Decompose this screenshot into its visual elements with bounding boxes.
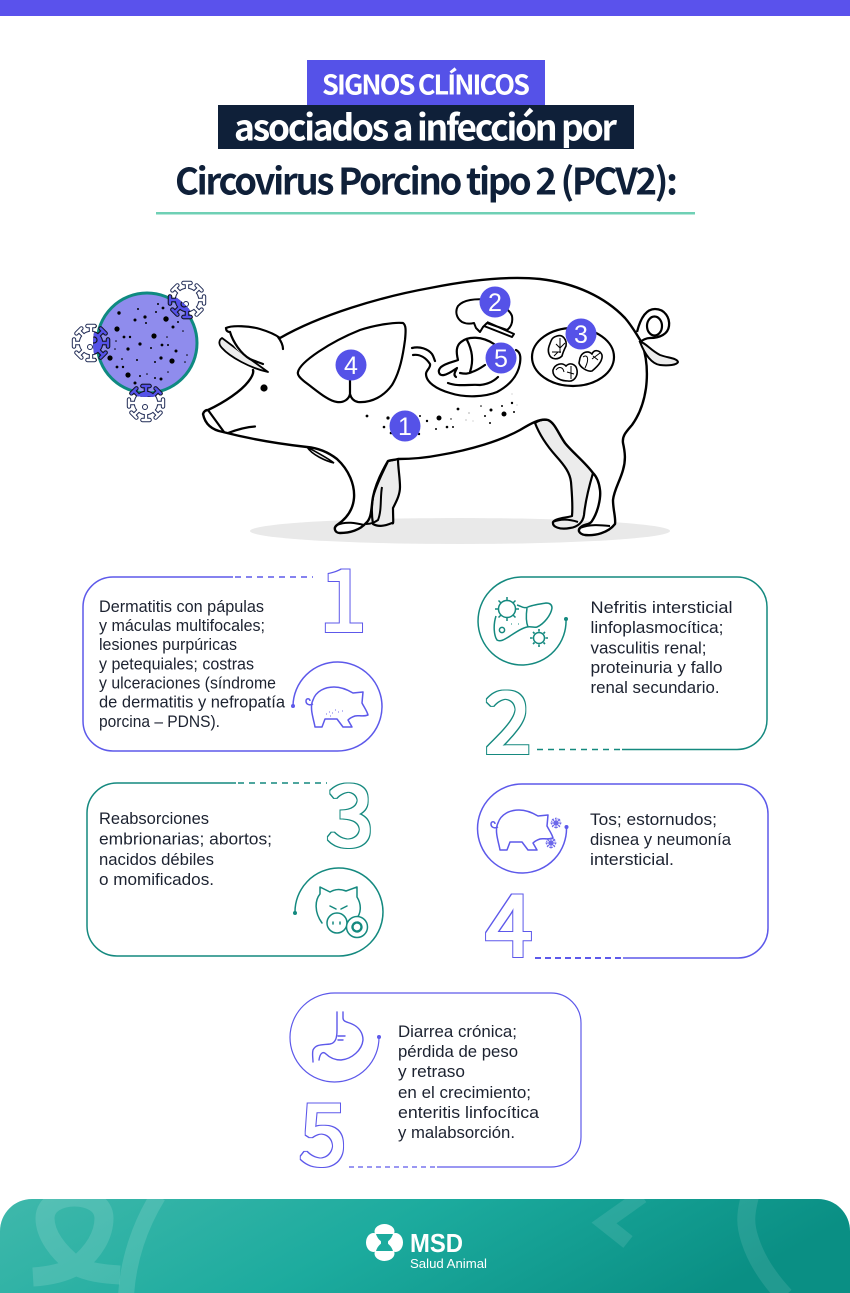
virus bottom [129, 386, 163, 420]
text block: y máculas multifocales; [99, 617, 265, 635]
text block: linfoplasmocítica; [590, 619, 724, 637]
panel 1: dermatitis [83, 533, 382, 751]
illustration: virus particle [74, 283, 204, 420]
virus top right [170, 283, 204, 317]
panel 3: reproductive [87, 748, 383, 956]
number badge 2 [480, 286, 510, 318]
tail [637, 309, 669, 342]
far hind leg [535, 420, 593, 529]
number badge 1: 1 [398, 413, 412, 441]
pig body [203, 278, 647, 535]
panel 4: respiratory [478, 784, 768, 981]
text block: lesiones purpúricas [99, 636, 237, 654]
sphere dots [107, 303, 188, 384]
big number 2: 2 [484, 655, 532, 778]
text block: de dermatitis y nefropatía [99, 694, 285, 712]
heading: signos clínicos: SIGNOS CLÍNICOS [322, 64, 530, 102]
Salud Animal: Salud Animal [410, 1256, 487, 1271]
lesion dots [366, 394, 518, 435]
number badge 3 [566, 318, 596, 350]
footer band [0, 1196, 850, 1293]
MSD logo mark [366, 1224, 403, 1261]
big number 5: 5 [299, 1067, 347, 1190]
number badge 4: 4 [344, 352, 358, 380]
text block: porcina – PDNS). [99, 713, 220, 731]
illustration: pig with lesions [203, 278, 678, 544]
text block: proteinuria y fallo [590, 659, 722, 677]
eye [260, 384, 268, 392]
big number 1: 1 [319, 533, 367, 656]
card outline [83, 577, 382, 751]
text block: Tos; estornudos; [590, 811, 717, 829]
text block: intersticial. [590, 851, 674, 869]
snout and mouth [208, 410, 255, 433]
card outline [290, 993, 581, 1167]
virus left [74, 326, 108, 360]
card outline [478, 577, 767, 750]
card outline [87, 783, 383, 956]
organ: lungs [298, 323, 406, 402]
far front leg [372, 459, 400, 526]
text block: Nefritis intersticial [590, 599, 732, 617]
number badge 5: 5 [494, 345, 508, 373]
text block: disnea y neumonía [590, 831, 731, 849]
heading: Circovirus Porcino tipo 2: Circovirus Porcino tipo 2 (PCV2): [175, 152, 678, 206]
card outline [478, 784, 768, 958]
ground shadow [250, 518, 670, 544]
top band [0, 0, 850, 16]
number badge 4 [336, 350, 366, 380]
text block: y petequiales; costras [99, 656, 254, 674]
hind hoof lines [553, 520, 610, 528]
number badge 3: 3 [574, 321, 588, 349]
MSD wordmark: MSD [410, 1228, 463, 1258]
text block: pérdida de peso [398, 1043, 518, 1061]
panel 2: nephritis [478, 577, 767, 778]
text block: y ulceraciones (síndrome [99, 674, 276, 692]
big number 4: 4 [485, 858, 533, 981]
footer decorative ribbons [33, 1196, 785, 1293]
ear [226, 327, 283, 364]
icon: pig sneezing [491, 810, 562, 850]
organ: intestine and stomach [412, 338, 520, 396]
icon: liver with virus [494, 597, 552, 647]
number badge 1 [390, 410, 420, 442]
text block: y malabsorción. [398, 1124, 515, 1142]
sphere [97, 293, 197, 393]
panel 5: digestive [290, 993, 581, 1190]
text block: vasculitis renal; [590, 640, 706, 658]
heading: asociados a infección por: asociados a infección por [234, 100, 618, 152]
icon: pig with skin lesions [306, 687, 368, 727]
icon: pig face with fetus [316, 887, 368, 938]
number badge 2: 2 [488, 289, 502, 317]
title [175, 60, 678, 206]
organ: uterus with fetuses [532, 328, 614, 386]
text block: Reabsorciones [99, 810, 209, 828]
text block: en el crecimiento; [398, 1084, 531, 1102]
text block: nacidos débiles [99, 851, 214, 869]
text block: Diarrea crónica; [398, 1023, 517, 1041]
number badge 5 [486, 342, 516, 374]
text block: renal secundario. [590, 679, 720, 697]
far ear [219, 338, 268, 372]
chest fold [307, 447, 334, 463]
organ: kidney [456, 299, 514, 337]
icon: stomach [313, 1012, 363, 1062]
ear lines [226, 326, 283, 364]
near front hoof [337, 487, 382, 525]
text block: Dermatitis con pápulas [99, 598, 264, 616]
text block: o momificados. [99, 871, 214, 889]
text block: embrionarias; abortos; [99, 830, 272, 848]
text block: enteritis linfocítica [398, 1104, 539, 1122]
text block: y retraso [398, 1063, 465, 1081]
big number 3: 3 [326, 748, 374, 871]
